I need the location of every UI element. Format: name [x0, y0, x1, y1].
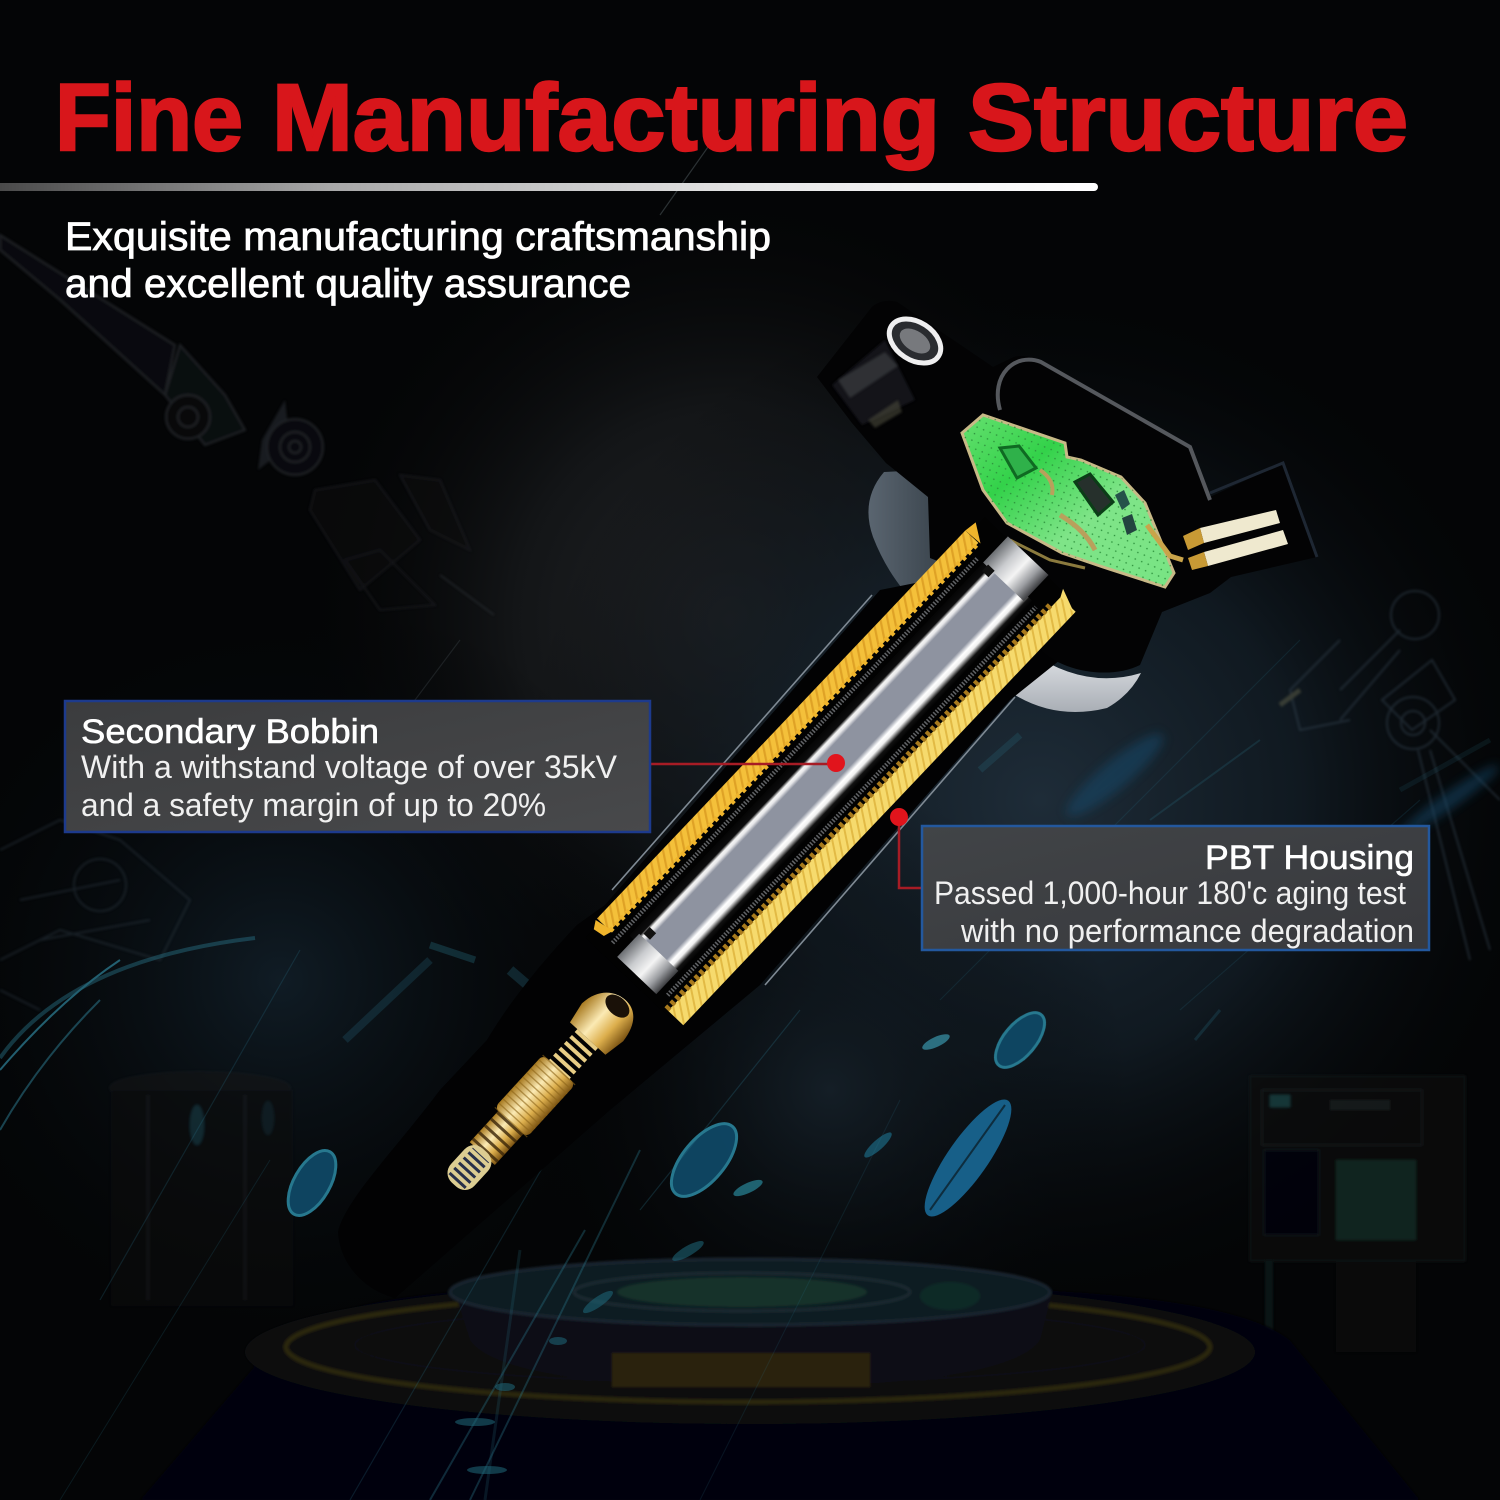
faint machine, lower left — [110, 1072, 292, 1305]
panel: secondary bobbin — [65, 701, 650, 832]
title: Manufacturing — [272, 65, 940, 171]
title: Structure — [968, 65, 1408, 171]
faint robot arm, right — [1280, 591, 1500, 960]
housing highlight lines — [612, 595, 872, 890]
thick spring — [494, 1055, 576, 1137]
faint circular platform — [140, 1259, 1420, 1500]
panel body — [81, 749, 618, 823]
secondary bobbin rod — [613, 536, 1053, 995]
subtitle: Exquisite manufacturing craftsmanship — [65, 215, 771, 259]
cutaway interior, rotated along coil axis — [582, 512, 1081, 1028]
green circuit board — [962, 415, 1183, 587]
panel body: and a safety margin of up to 20% — [81, 787, 546, 823]
panel body: with no performance degradation — [960, 913, 1414, 949]
gold solder joint — [1060, 515, 1095, 550]
connector pins — [1183, 510, 1288, 570]
leader line: PBT housing — [890, 808, 921, 888]
left yellow winding — [590, 521, 989, 940]
title — [55, 65, 1408, 171]
subtitle — [65, 215, 771, 306]
spring tip — [442, 1140, 497, 1195]
right yellow winding — [665, 589, 1081, 1025]
panel: PBT housing — [922, 826, 1429, 950]
faint machine, lower right — [1250, 1076, 1465, 1352]
panel body — [934, 875, 1414, 949]
flange disc, silver lower side — [1003, 652, 1141, 712]
upper head and bolt sleeve — [817, 301, 1317, 673]
flange disc, dark left side — [868, 470, 990, 592]
title: Fine — [55, 65, 243, 171]
bolt sleeve translucent cylinder — [832, 340, 915, 425]
contact cap — [567, 980, 645, 1057]
head raised outline — [998, 360, 1210, 500]
title rule — [0, 183, 1098, 191]
subtitle: and excellent quality assurance — [65, 262, 631, 306]
ignition coil cutaway — [338, 301, 1317, 1298]
lower spring — [470, 1111, 523, 1165]
panel heading: PBT Housing — [1205, 839, 1414, 877]
panel body: With a withstand voltage of over 35kV — [81, 749, 618, 785]
bolt hole metal ring — [881, 310, 949, 372]
connector shroud edge — [1210, 463, 1317, 557]
dotted windings — [613, 555, 1036, 995]
panel heading: Secondary Bobbin — [81, 713, 379, 751]
leader line: secondary bobbin — [651, 754, 845, 772]
gold spark spring — [433, 980, 645, 1203]
square chip — [1000, 446, 1036, 478]
thin spring — [559, 1039, 588, 1070]
black housing tube and boot — [338, 560, 1120, 1298]
faint robot arm, upper left — [0, 235, 494, 615]
dark IC — [1075, 474, 1113, 515]
faint robot arm, lower left — [0, 820, 190, 1010]
panel body: Passed 1,000-hour 180'c aging test — [934, 875, 1406, 911]
